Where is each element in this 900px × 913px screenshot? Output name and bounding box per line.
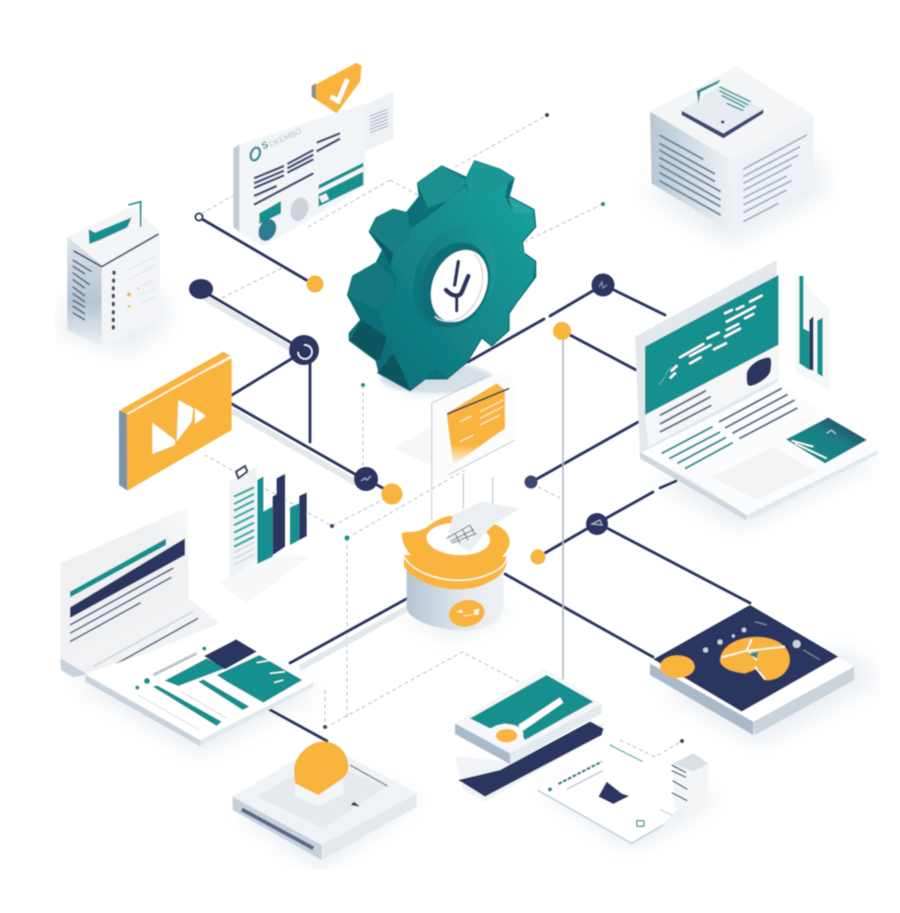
panel: isometric document cube bbox=[650, 67, 813, 232]
vertical grey connector bbox=[562, 335, 564, 682]
panel: amber button on platform bbox=[233, 742, 417, 860]
icon: check shield bbox=[312, 63, 362, 113]
dashed guide lines bbox=[201, 115, 682, 757]
side text lines bbox=[73, 260, 92, 320]
icon: document logo bbox=[249, 139, 270, 162]
badge on cylinder bbox=[447, 597, 487, 630]
panel: floating amber document bbox=[393, 367, 515, 520]
card: report document with check badge bbox=[233, 63, 393, 247]
panel: teal slider card bbox=[455, 668, 603, 802]
chart: bar chart with legend bbox=[220, 466, 310, 603]
panel: dark tablet with pie chart bbox=[650, 605, 854, 735]
icon: amber database cylinder bbox=[402, 502, 520, 630]
panel: server document bbox=[67, 202, 160, 347]
panel: white document with box bbox=[537, 743, 708, 843]
icon: amber media tile bbox=[119, 352, 232, 491]
text: document heading: DKEMBO bbox=[268, 126, 303, 149]
connector lines bbox=[202, 219, 750, 741]
document text lines bbox=[254, 133, 340, 205]
screen text marks bbox=[671, 296, 762, 378]
bullet dots bbox=[112, 270, 116, 330]
teal to navy mini card bbox=[786, 417, 867, 463]
dashed line end dots bbox=[323, 113, 684, 743]
soft ground shadows bbox=[55, 150, 880, 870]
keyboard deck with teal dashboard bbox=[85, 630, 313, 746]
icon: document logo: S bbox=[260, 139, 270, 151]
chart: vertical mini bars bbox=[795, 273, 830, 390]
connector nodes bbox=[189, 214, 614, 564]
panel: laptop right bbox=[635, 260, 878, 521]
panel: laptop left bbox=[60, 507, 313, 746]
grey line shadows bbox=[205, 298, 408, 668]
icon: teal gear bbox=[348, 162, 535, 393]
tile on top of cube bbox=[682, 79, 763, 138]
teal status blocks bbox=[259, 163, 363, 224]
teal folder tab bbox=[89, 202, 141, 244]
pie chart bbox=[720, 637, 790, 680]
document on lid bbox=[447, 502, 520, 552]
dark webcam tile bbox=[747, 357, 771, 386]
